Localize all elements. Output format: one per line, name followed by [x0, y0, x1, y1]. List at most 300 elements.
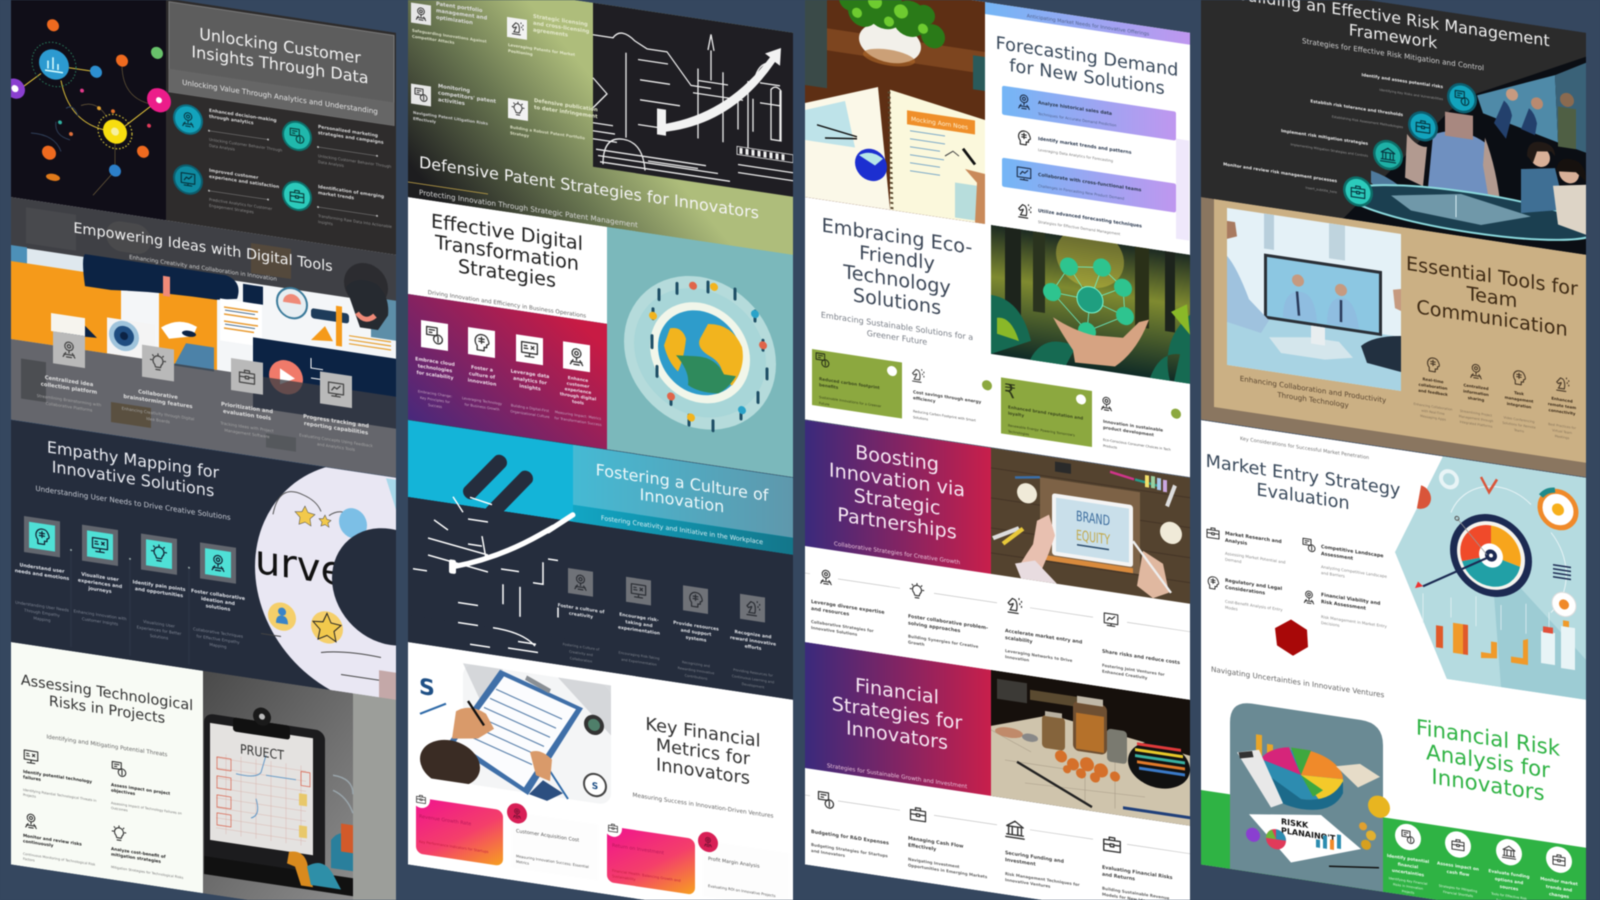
- subtitle: Identifying and Mitigating Potential Threats: [47, 734, 168, 758]
- panel: Empathy Mapping: [10, 420, 397, 700]
- item: task management: Teams: [1513, 428, 1524, 433]
- item: remote connectivity: [1548, 375, 1577, 441]
- card: brand reputation: Renewable Energy: Powering Tomorrow's: [1008, 423, 1075, 437]
- card: profit margin: Profit Margin Analysis: [708, 856, 760, 870]
- title: Empathy Mapping for: [47, 437, 219, 482]
- item: task management: Video Conferencing: [1503, 415, 1535, 424]
- title: Strategic: [854, 484, 940, 520]
- subtitle: Navigating Uncertainties in Innovative Ventures: [1211, 665, 1384, 700]
- item: reward: [730, 592, 776, 691]
- card: cost savings: Solutions: [913, 415, 928, 421]
- item: monitoring: activities: [438, 97, 465, 107]
- item: task management: Task: [1514, 390, 1524, 396]
- title: Financial Risk: [1416, 715, 1560, 762]
- item: monitor: continuously: [23, 838, 54, 848]
- item: brainstorming: Enhancing Creativity through Digital: [122, 406, 194, 421]
- panel: Empowering Ideas: [11, 197, 396, 478]
- card: return on investment: Sustainability: [612, 874, 636, 882]
- item: market entry: scalability: [1005, 635, 1033, 645]
- item: market trends: changes: [1549, 891, 1569, 900]
- item: risk-taking: experimentation: [618, 625, 660, 637]
- item: ideation: for Effective Empathy: [196, 633, 240, 645]
- item: competitive landscape: Competitive Landscape: [1321, 545, 1383, 559]
- card: carbon footprint: benefits: [819, 382, 839, 390]
- item: defensive publication: [507, 97, 598, 140]
- item: licensing: Positioning: [508, 48, 533, 57]
- accent line: [408, 182, 488, 194]
- item: resources: and support: [681, 627, 712, 638]
- item: creativity: Foster a culture of: [558, 603, 604, 615]
- item: cash flow: cash flow: [1447, 869, 1469, 878]
- item: understand user: Through Empathy: [23, 607, 60, 618]
- image: hand with green network in forest: [991, 213, 1190, 384]
- item: impact: Outcomes: [111, 806, 128, 813]
- panel: Fostering a Culture: [408, 420, 793, 701]
- item: monitoring: competitors' patent: [438, 90, 497, 105]
- item: financial viability: [1304, 590, 1387, 635]
- item: real-time: Enhancing Collaboration: [1414, 402, 1452, 412]
- item: visualize: Visualize user: [81, 573, 119, 583]
- item: uncertainties: uncertainties: [1392, 868, 1424, 879]
- item: share risks: Enhanced Creativity: [1102, 669, 1148, 680]
- item: tolerance: Establish risk tolerance and thresholds: [1310, 98, 1403, 117]
- item: share risks: [1102, 613, 1180, 685]
- item: real-time: with Real-Time: [1421, 409, 1445, 416]
- item: analytics: [510, 333, 550, 419]
- card: brand reputation: [1001, 377, 1092, 447]
- image: person with clipboard: S: [592, 782, 598, 793]
- item: regulatory: Modes: [1225, 605, 1238, 611]
- item: uncertainties: Identifying Key Financial: [1389, 876, 1427, 886]
- card: brand reputation: ₹: [1004, 379, 1016, 404]
- item: failures: [23, 750, 96, 808]
- item: monitor: Factors: [23, 857, 35, 863]
- title: Market Entry Strategy: [1206, 451, 1400, 501]
- item: customer experience: tools: [572, 399, 584, 407]
- item: cash flow: Effectively: [908, 842, 937, 853]
- item: funding: Investment: [1005, 857, 1036, 868]
- item: ideation: [191, 541, 246, 652]
- title block: [805, 420, 991, 574]
- image: project clipboard: PRUECT: [240, 742, 285, 764]
- item: pain points: and opportunities: [135, 586, 183, 599]
- title: Effective Digital: [431, 210, 583, 255]
- card: return on investment: [604, 817, 695, 895]
- item: task management: management: [1505, 395, 1534, 404]
- item: defensive publication: Building a Robust Patent Portfolio: [510, 124, 585, 141]
- item: licensing: and cross-licensing: [533, 21, 590, 35]
- item: budgeting: [811, 790, 889, 865]
- green band: [1201, 790, 1586, 900]
- panel: Effective Digital Transformation: [408, 197, 793, 478]
- card: product development: Innovation in sustainable: [1103, 419, 1163, 433]
- item: competitive landscape: Analyzing Competitive Landscape: [1321, 564, 1387, 579]
- item: progress tracking: reporting capabilities: [304, 421, 368, 437]
- title: Evaluation: [1256, 479, 1350, 514]
- item: creativity: Collaboration: [570, 656, 592, 664]
- item: idea collection: Collaborative Platforms: [46, 401, 92, 413]
- item: creativity: Creativity and: [569, 650, 593, 657]
- item: customer experience: [554, 340, 602, 427]
- subtitle: Unlocking Value Through Analytics and Understanding: [182, 78, 378, 116]
- item: cash flow: Managing Cash Flow: [908, 836, 963, 850]
- item: mitigation: Implement risk mitigation strategies: [1281, 128, 1368, 146]
- item: visualize: journeys: [87, 585, 112, 595]
- item: diverse expertise: [811, 568, 885, 641]
- item: idea collection: Centralized idea: [45, 375, 93, 388]
- subtitle: Strategies for Sustainable Growth and Investment: [827, 763, 968, 790]
- item: analytics: analytics for: [513, 376, 547, 387]
- item: brainstorming: Collaborative: [138, 389, 178, 401]
- title: Innovation: [640, 485, 724, 516]
- item: risk-taking: [618, 575, 660, 667]
- item: risk-taking: and Experimentation: [621, 657, 657, 667]
- item: diverse expertise: Collaborative Strategies for: [811, 619, 874, 633]
- title: Key Financial: [645, 714, 761, 752]
- title: Metrics for: [656, 735, 751, 770]
- panel: Financial Risk Analysis: [1201, 642, 1586, 900]
- item: mitigation: Implementing Mitigation Strategies and Controls: [1290, 142, 1368, 158]
- subtitle: Understanding User Needs to Drive Creative Solutions: [35, 484, 231, 522]
- item: resources: Provide resources: [673, 621, 719, 633]
- title: Team: [1466, 282, 1517, 312]
- item: culture: Foster a: [471, 365, 493, 374]
- item: resources: Contributions: [685, 674, 708, 681]
- item: culture: culture of: [469, 371, 496, 381]
- subtitle band: [573, 505, 793, 555]
- title: Assessing Technological: [21, 673, 193, 714]
- card: cost savings: Reducing Carbon Footprint with Smart: [913, 409, 976, 423]
- item: monitor: [1223, 156, 1373, 209]
- item: resources: [673, 584, 719, 683]
- panel: Key Financial Metrics: [408, 642, 793, 900]
- item: funding: [1005, 820, 1080, 893]
- item: budgeting: Budgeting Strategies for Startups: [811, 842, 888, 858]
- card: return on investment: Financial Health: Balancing Growth and: [612, 869, 681, 883]
- item: visualize: Enhancing Innovation with: [73, 608, 127, 621]
- subtitle: Greener Future: [867, 329, 927, 347]
- item: cash flow: Strategies for Mitigating: [1439, 884, 1477, 893]
- title: Communication: [1416, 295, 1568, 341]
- item: market trends: [1540, 844, 1578, 900]
- item: task management: Solutions for Remote: [1502, 421, 1536, 430]
- title: Analysis for: [1426, 740, 1550, 784]
- card: historical sales: Analyze historical sales data: [1038, 100, 1112, 117]
- item: pain points: [133, 532, 186, 643]
- title block: [805, 642, 991, 796]
- item: idea collection: Streamlining Brainstorming with: [37, 393, 101, 408]
- item: impact: Assess impact on project: [111, 782, 170, 796]
- title: Innovators: [846, 716, 948, 754]
- item: uncertainties: Projects: [1402, 889, 1415, 895]
- item: funding: Risk Management Techniques for: [1005, 871, 1080, 887]
- item: remote connectivity: Best Practices for: [1548, 422, 1576, 430]
- item: understand user: [15, 515, 69, 626]
- item: real-time: and feedback: [1418, 388, 1448, 397]
- panel: Assessing Technological Risks: [11, 642, 396, 900]
- panel: Forecasting Demand: [805, 0, 1190, 255]
- title: Innovative Solutions: [52, 457, 214, 500]
- image: survey sheet in circle: [254, 466, 397, 700]
- top band text: Anticipating Market Needs for Innovative Offerings: [1027, 13, 1150, 38]
- panel: Market Entry: [1201, 420, 1586, 700]
- item: personalized marketing: Unlocking Customer Behavior Through: [318, 153, 391, 169]
- item: real-time: collaboration: [1419, 382, 1448, 391]
- subtitle: Enhancing Collaboration and Productivity: [1240, 374, 1386, 405]
- item: customer experience: Enhance: [568, 376, 588, 384]
- item: returns: Evaluating Financial Risks: [1102, 866, 1172, 881]
- item: remote connectivity: Enhanced: [1551, 396, 1573, 404]
- image: brand equity tablet: [991, 448, 1190, 604]
- item: mitigation: [1281, 124, 1403, 172]
- item: personalized marketing: Data Analysis: [318, 159, 344, 168]
- panel: Boosting Innovation: [805, 420, 1190, 700]
- card: forecasting techniques: Utilize advanced forecasting techniques: [1038, 208, 1142, 230]
- item: monitor: Monitor and review risks: [23, 833, 82, 847]
- item: understand user: Understand user: [19, 563, 65, 575]
- card: revenue growth: Key Performance Indicators for Startups: [419, 840, 489, 854]
- card: brand reputation: Technologies: [1007, 429, 1029, 437]
- item: ideation: Mapping: [209, 642, 227, 649]
- card: market trends: Leveraging Data Analytics for Forecasting: [1038, 148, 1113, 163]
- subtitle: Fostering Creativity and Initiative in the Workplace: [601, 514, 763, 546]
- item: defensive publication: Defensive publication: [534, 98, 598, 113]
- card: carbon footprint: Reduced carbon footprint: [819, 376, 880, 390]
- image: project clipboard: [203, 671, 396, 900]
- item: prioritization: Prioritization and: [221, 402, 273, 415]
- title: Framework: [1349, 20, 1438, 53]
- item: competitive landscape: [1303, 538, 1387, 585]
- item: task management: [1502, 368, 1536, 435]
- card: return on investment: Return on Investment: [612, 843, 664, 856]
- card: historical sales: [1002, 86, 1176, 141]
- subtitle: Embracing Sustainable Solutions for a: [821, 310, 973, 342]
- item: market trends: Monitor market: [1540, 877, 1578, 888]
- item: remote connectivity: remote team: [1548, 401, 1576, 410]
- card: market trends: Identify market trends and patterns: [1038, 136, 1132, 156]
- item: competitive landscape: Assessment: [1321, 551, 1354, 562]
- title: Transformation: [434, 231, 579, 275]
- subtitle: Protecting Innovation Through Strategic Patent Management: [419, 188, 638, 229]
- item: resources: Recognizing and: [682, 660, 710, 668]
- item: monitor: Insert_subtitle_here: [1306, 186, 1337, 194]
- image: network of nodes: [5, 0, 171, 221]
- item: cloud: [415, 319, 455, 411]
- item: monitoring: [410, 82, 496, 126]
- item: impact: objectives: [111, 788, 136, 796]
- item: regulatory: Regulatory and Legal: [1225, 579, 1282, 592]
- item: decision-making: [172, 104, 282, 152]
- item: remote connectivity: connectivity: [1549, 407, 1576, 416]
- item: pain points: Experiences for Better: [137, 624, 182, 636]
- subtitle: Collaborative Strategies for Creative Growth: [834, 541, 960, 566]
- item: customer experience: for Transformation Success: [554, 416, 602, 427]
- subtitle: Through Technology: [1276, 390, 1349, 410]
- item: risk-taking: taking and: [625, 619, 653, 629]
- item: cash flow: [908, 807, 988, 879]
- item: creativity: creativity: [569, 611, 593, 620]
- item: cash flow: Financial Shortfalls: [1443, 890, 1473, 898]
- image: person with clipboard: S: [419, 674, 435, 702]
- item: customer experience: customer: [567, 381, 590, 390]
- small heading: Key Considerations for Successful Market Penetration: [1240, 436, 1369, 461]
- item: emerging trends: market trends: [318, 190, 354, 201]
- item: emerging trends: Identification of emerging: [318, 185, 384, 200]
- item: information sharing: Centralized: [1464, 382, 1488, 391]
- item: ideation: Foster collaborative: [191, 589, 245, 602]
- item: pain points: Visualizing User: [143, 619, 175, 629]
- item: customer experience: Predictive Analytics for Customer: [209, 197, 272, 211]
- item: progress tracking: Evaluating Concepts Using Feedback: [299, 432, 373, 448]
- item: licensing: [506, 14, 590, 57]
- item: cash flow: Opportunities in Emerging Markets: [908, 862, 988, 879]
- item: financial viability: Financial Viability and: [1321, 593, 1380, 607]
- item: uncertainties: [1387, 821, 1430, 897]
- item: market research: Demand: [1225, 557, 1242, 564]
- item: reward: Providing Resources for: [733, 668, 773, 678]
- item: analytics: Building a Digital-First: [511, 403, 549, 413]
- item: market entry: [1005, 596, 1083, 671]
- item: brainstorming: [122, 342, 194, 428]
- title: Essential Tools for: [1406, 252, 1578, 301]
- card: carbon footprint: Future: [819, 401, 829, 407]
- item: licensing: Strategic licensing: [533, 14, 588, 28]
- item: progress tracking: [299, 368, 374, 455]
- item: problem-solving: solving approaches: [908, 620, 960, 634]
- item: diverse expertise: and resources: [811, 606, 849, 618]
- item: cloud: Embracing Change:: [418, 389, 452, 399]
- item: risk-taking: Encouraging Risk-Taking: [618, 651, 660, 661]
- item: risk-taking: Encourage risk-: [619, 613, 659, 624]
- item: brainstorming: Idea Boards: [146, 416, 170, 424]
- item: pain points: Identify pain points: [133, 580, 185, 593]
- item: monitor: Continuous Monitoring of Technological Risk: [23, 852, 95, 867]
- item: culture: for Business Growth: [465, 402, 499, 412]
- image: person with clipboard: [418, 656, 611, 815]
- item: information sharing: sharing: [1468, 395, 1484, 403]
- item: decision-making: Unlocking Customer Behavior Through: [209, 137, 282, 153]
- item: market trends: trends and: [1546, 884, 1572, 894]
- title: Defensive Patent Strategies for Innovators: [419, 153, 759, 223]
- title: Unlocking Customer: [199, 24, 361, 67]
- item: real-time: Real-time: [1422, 376, 1444, 384]
- item: reward: Recognize and: [735, 630, 771, 641]
- item: cash flow: Assess impact on: [1437, 861, 1479, 873]
- image: target infographic: [1395, 449, 1586, 700]
- item: remote connectivity: Virtual Team: [1552, 428, 1572, 435]
- item: personalized marketing: Personalized marketing: [318, 125, 378, 139]
- item: decision-making: Enhanced decision-making: [209, 109, 277, 124]
- item: prioritization: [219, 356, 274, 440]
- card: cross-functional: Challenges in Forecasting New Product Demand: [1038, 184, 1124, 201]
- item: cost-benefit: Mitigation Strategies for Technological Risks: [111, 865, 184, 880]
- item: creativity: [558, 566, 604, 665]
- image: line art city with arrow: [593, 3, 793, 197]
- item: market entry: Accelerate market entry and: [1005, 629, 1082, 646]
- card: acquisition cost: Measuring Innovation Success: Essential: [516, 854, 589, 869]
- item: cash flow: [1437, 828, 1479, 899]
- item: reward: efforts: [745, 644, 762, 652]
- item: financial viability: Risk Management in Market Entry: [1321, 614, 1387, 629]
- card: historical sales: Techniques for Accurate Demand Prediction: [1037, 112, 1116, 128]
- item: monitor: Monitor and review risk management processes: [1223, 161, 1337, 183]
- item: pain points: Solutions: [150, 633, 168, 641]
- title: Innovators: [1431, 765, 1545, 807]
- item: resources: Rewarding Innovative: [678, 666, 714, 675]
- title: Fostering a Culture of: [596, 460, 768, 505]
- title: Risks in Projects: [49, 694, 165, 727]
- item: culture: [462, 326, 502, 412]
- item: visualize: Customer Insights: [82, 616, 118, 627]
- item: ideation: Collaborative Techniques: [193, 626, 243, 639]
- title: Strategies: [458, 255, 556, 292]
- item: failures: Projects: [23, 793, 36, 799]
- title: Insights Through Data: [191, 42, 369, 88]
- item: financial viability: Risk Assessment: [1321, 599, 1367, 612]
- item: tolerance: [1310, 94, 1438, 144]
- panel: Unlocking Customer Insights: [5, 0, 396, 255]
- item: budgeting: and Innovators: [811, 848, 846, 858]
- image: notebook on wooden desk: [805, 0, 985, 224]
- item: information sharing: [1459, 362, 1493, 429]
- item: identify risks: Identifying Key Risks and Vulnerabilities: [1379, 88, 1443, 101]
- item: market research: Analysis: [1225, 538, 1247, 547]
- item: cost-benefit: mitigation strategies: [111, 852, 161, 864]
- item: impact: [111, 761, 182, 821]
- card: acquisition cost: Customer Acquisition Cost: [516, 828, 579, 844]
- item: patent portfolio: [410, 1, 488, 44]
- item: patent portfolio: Competitor Attacks: [412, 34, 455, 45]
- item: culture: Leveraging Technology: [462, 396, 502, 406]
- image: brand equity tablet: BRAND: [1076, 509, 1110, 530]
- header band: [169, 2, 394, 125]
- item: problem-solving: Foster collaborative problem-: [908, 614, 988, 631]
- title: Partnerships: [837, 503, 957, 544]
- item: ideation: solutions: [206, 603, 230, 613]
- image: 3D pie chart and risk planning: RISKK: [1281, 817, 1308, 830]
- image: holographic team meeting: [1343, 20, 1596, 257]
- item: decision-making: through analytics: [209, 114, 254, 126]
- item: patent portfolio: Safeguarding Innovations Against: [412, 28, 487, 44]
- item: funding: Innovative Ventures: [1005, 877, 1051, 889]
- card: product development: Products: [1103, 444, 1117, 450]
- item: regulatory: Considerations: [1225, 585, 1265, 597]
- subtitle: Measuring Success in Innovation-Driven Ventures: [633, 793, 773, 820]
- title: Innovators: [656, 754, 750, 789]
- top band: [985, 2, 1190, 45]
- item: diverse expertise: Innovative Solutions: [811, 625, 858, 637]
- item: licensing: agreements: [533, 27, 568, 39]
- item: monitoring: Effectively: [413, 116, 436, 124]
- item: licensing: Leveraging Patents for Market: [508, 42, 575, 57]
- item: emerging trends: [282, 180, 392, 228]
- item: impact: Assessing Impact of Technology Failures on: [111, 801, 182, 816]
- card: brand reputation: Enhanced brand reputation and: [1008, 404, 1083, 421]
- item: prioritization: Tracking Ideas with Project: [220, 420, 274, 433]
- item: problem-solving: Growth: [908, 639, 925, 647]
- card: forecasting techniques: Strategies for Effective Demand Management: [1038, 220, 1121, 236]
- item: patent portfolio: management and: [436, 8, 487, 22]
- item: identify risks: Identify and assess potential risks: [1362, 72, 1443, 89]
- item: funding: Securing Funding and: [1005, 851, 1064, 865]
- card: forecasting techniques: [1002, 195, 1176, 250]
- image: notebook on wooden desk: Mocking Aom Noes: [911, 116, 968, 131]
- title: Innovation via: [829, 458, 965, 502]
- subtitle: Enhancing Creativity and Collaboration in Innovation: [129, 255, 277, 283]
- item: customer experience: through digital: [560, 391, 597, 403]
- subtitle: Strategies for Effective Risk Mitigation and Control: [1302, 36, 1484, 72]
- item: market research: Assessing Market Potential and: [1225, 551, 1286, 565]
